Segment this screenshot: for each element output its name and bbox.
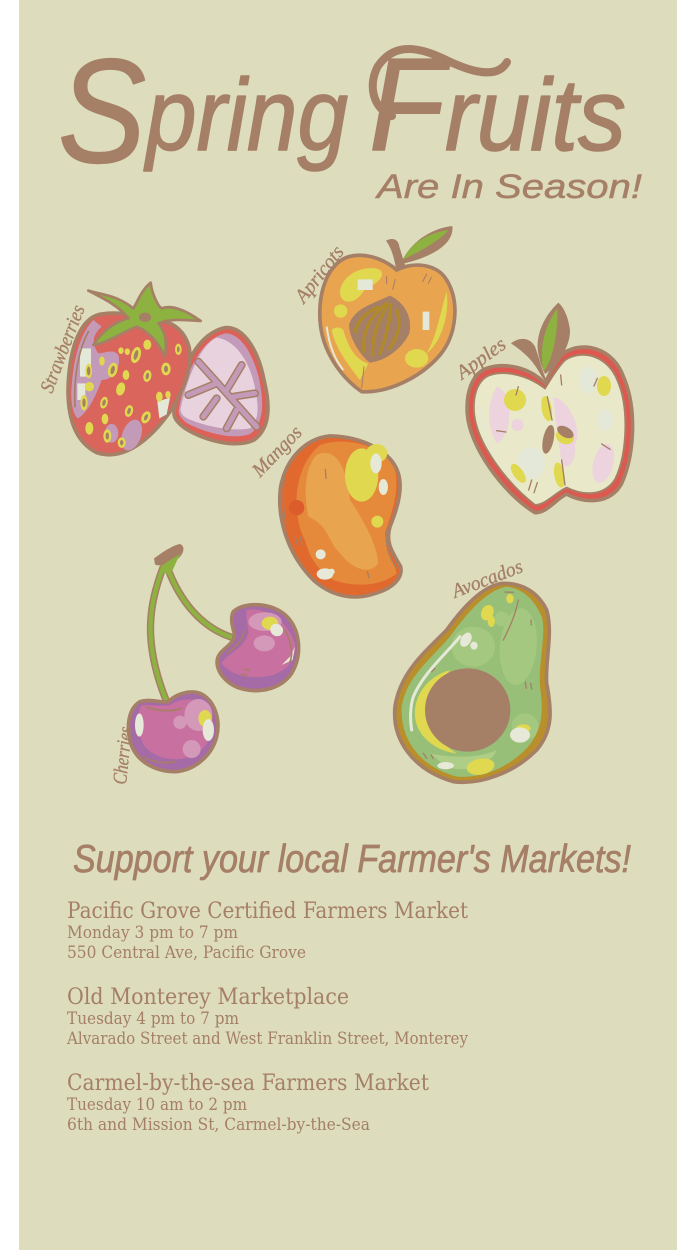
title word: Fruits: Fruits: [369, 31, 626, 178]
fruit: strawberries: [68, 283, 268, 455]
title word: Spring: S: [58, 29, 146, 194]
label: Avocados: Avocados: [447, 556, 526, 603]
apple stem and leaf: [511, 303, 570, 385]
market: Carmel-by-the-sea: Carmel-by-the-sea Farmers Market: [67, 1071, 429, 1096]
title flourish: [373, 49, 507, 116]
market: Carmel-by-the-sea: 6th and Mission St, Carmel-by-the-Sea: [67, 1115, 370, 1134]
apricot pit: [350, 297, 409, 362]
strawberry half: [174, 328, 268, 444]
label: Apples: Apples: [450, 333, 510, 385]
label: Cherries: Cherries: [109, 725, 137, 786]
label: Strawberries: Strawberries: [36, 302, 90, 396]
fruit: avocado: [395, 583, 550, 782]
market: Carmel-by-the-sea: Tuesday 10 am to 2 pm: [67, 1095, 247, 1114]
market: Pacific Grove: Pacific Grove Certified Farmers Market: [67, 899, 468, 924]
fruit: apple: [467, 303, 633, 513]
market: Old Monterey: Old Monterey Marketplace: [67, 985, 349, 1010]
lower cherry: [128, 692, 218, 772]
market: Pacific Grove: [67, 899, 468, 962]
strawberry whole: [68, 283, 201, 455]
apple body: [467, 347, 633, 513]
title word: Spring: pring: [143, 58, 348, 172]
apricot body: [320, 255, 455, 392]
market: Old Monterey: Tuesday 4 pm to 7 pm: [67, 1009, 239, 1028]
cherry stems: [150, 544, 232, 702]
title: [58, 29, 643, 206]
market: Pacific Grove: Monday 3 pm to 7 pm: [67, 923, 238, 942]
fruit: apricot: [320, 226, 455, 392]
label: Mangos: Mangos: [247, 421, 307, 482]
label: Apricots: Apricots: [289, 241, 349, 309]
upper cherry: [217, 605, 299, 691]
avocado pit: [425, 668, 510, 752]
market: Pacific Grove: 550 Central Ave, Pacific Grove: [67, 943, 306, 962]
apricot stem and leaf: [386, 226, 452, 273]
market: Old Monterey: [66, 985, 469, 1048]
market: Old Monterey: Alvarado Street and West Franklin Street, Monterey: [66, 1029, 469, 1048]
fruit: cherries: [128, 544, 299, 772]
call to action heading: Support your local Farmer's Markets!: [73, 838, 631, 881]
fruit: mango: [280, 436, 401, 597]
subtitle: Are In Season!: [375, 168, 643, 206]
market: Carmel-by-the-sea: [67, 1071, 429, 1134]
